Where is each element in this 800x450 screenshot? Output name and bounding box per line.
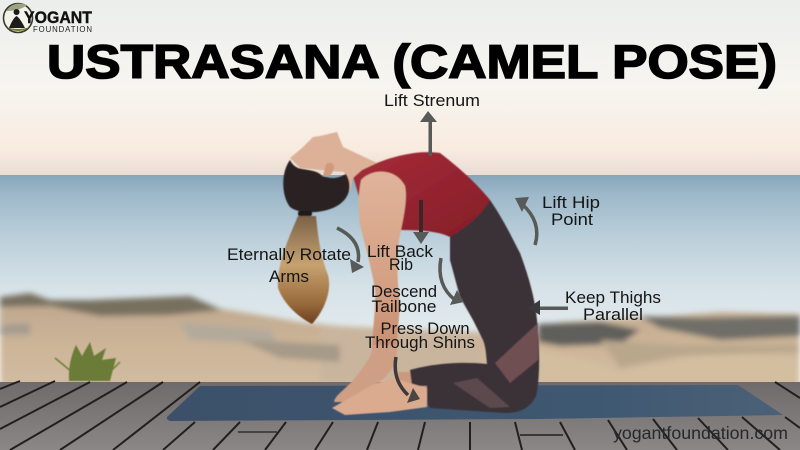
arrow: keep thighs parallel xyxy=(528,300,568,315)
label: lift back rib: Rib xyxy=(389,255,413,274)
ponytail xyxy=(278,216,329,324)
front arm xyxy=(359,172,406,350)
label: keep thighs parallel xyxy=(565,288,661,324)
label: keep thighs parallel: Parallel xyxy=(583,305,643,324)
title: USTRASANA (CAMEL POSE) xyxy=(47,35,777,88)
mesh panels xyxy=(495,323,538,383)
labels xyxy=(227,91,661,352)
label: lift back rib: Lift Back xyxy=(367,242,433,261)
label: eternally rotate arms xyxy=(227,245,351,286)
arrow: descend tailbone xyxy=(440,258,464,305)
label: press down through shins: Through Shins xyxy=(365,333,475,352)
red top xyxy=(353,152,490,237)
yoga mat xyxy=(167,385,783,421)
arrow: lift hip point xyxy=(515,197,537,245)
label: lift sternum: Lift Strenum xyxy=(384,91,480,110)
label: descend tailbone xyxy=(371,282,437,316)
label: lift hip point: Lift Hip xyxy=(542,193,600,212)
neck and face xyxy=(290,132,377,192)
arrow: lift back rib xyxy=(413,200,429,244)
foot xyxy=(332,378,427,415)
plant xyxy=(55,342,120,381)
label: press down through shins: Press Down xyxy=(380,319,470,338)
label: descend tailbone: Tailbone xyxy=(372,297,436,316)
hands xyxy=(334,345,397,402)
ear xyxy=(323,163,334,176)
logo: Yogant Foundation xyxy=(4,3,93,34)
label: eternally rotate arms: Eternally Rotate xyxy=(227,245,351,264)
label: eternally rotate arms: Arms xyxy=(269,267,309,286)
leggings xyxy=(410,200,539,413)
logo wordmark: YOGANT xyxy=(24,8,93,27)
label: keep thighs parallel: Keep Thighs xyxy=(565,288,661,307)
arrow: rotate arms xyxy=(337,228,364,273)
heel behind the shin xyxy=(398,372,428,392)
label: descend tailbone: Descend xyxy=(371,282,437,301)
label: press down through shins xyxy=(365,319,475,352)
logo subtitle: FOUNDATION xyxy=(33,25,92,34)
wooden deck xyxy=(0,381,800,450)
website url: yogantfoundation.com xyxy=(613,423,788,443)
label: lift back rib xyxy=(367,242,433,274)
arrow: press down through shins xyxy=(395,357,420,403)
hair xyxy=(283,160,350,212)
hair tie xyxy=(298,211,312,216)
label: lift hip point: Point xyxy=(551,210,593,229)
logo emblem xyxy=(4,3,32,32)
label: lift hip point xyxy=(542,193,600,229)
woman in camel pose xyxy=(278,132,539,415)
arrow: lift sternum xyxy=(420,111,437,156)
